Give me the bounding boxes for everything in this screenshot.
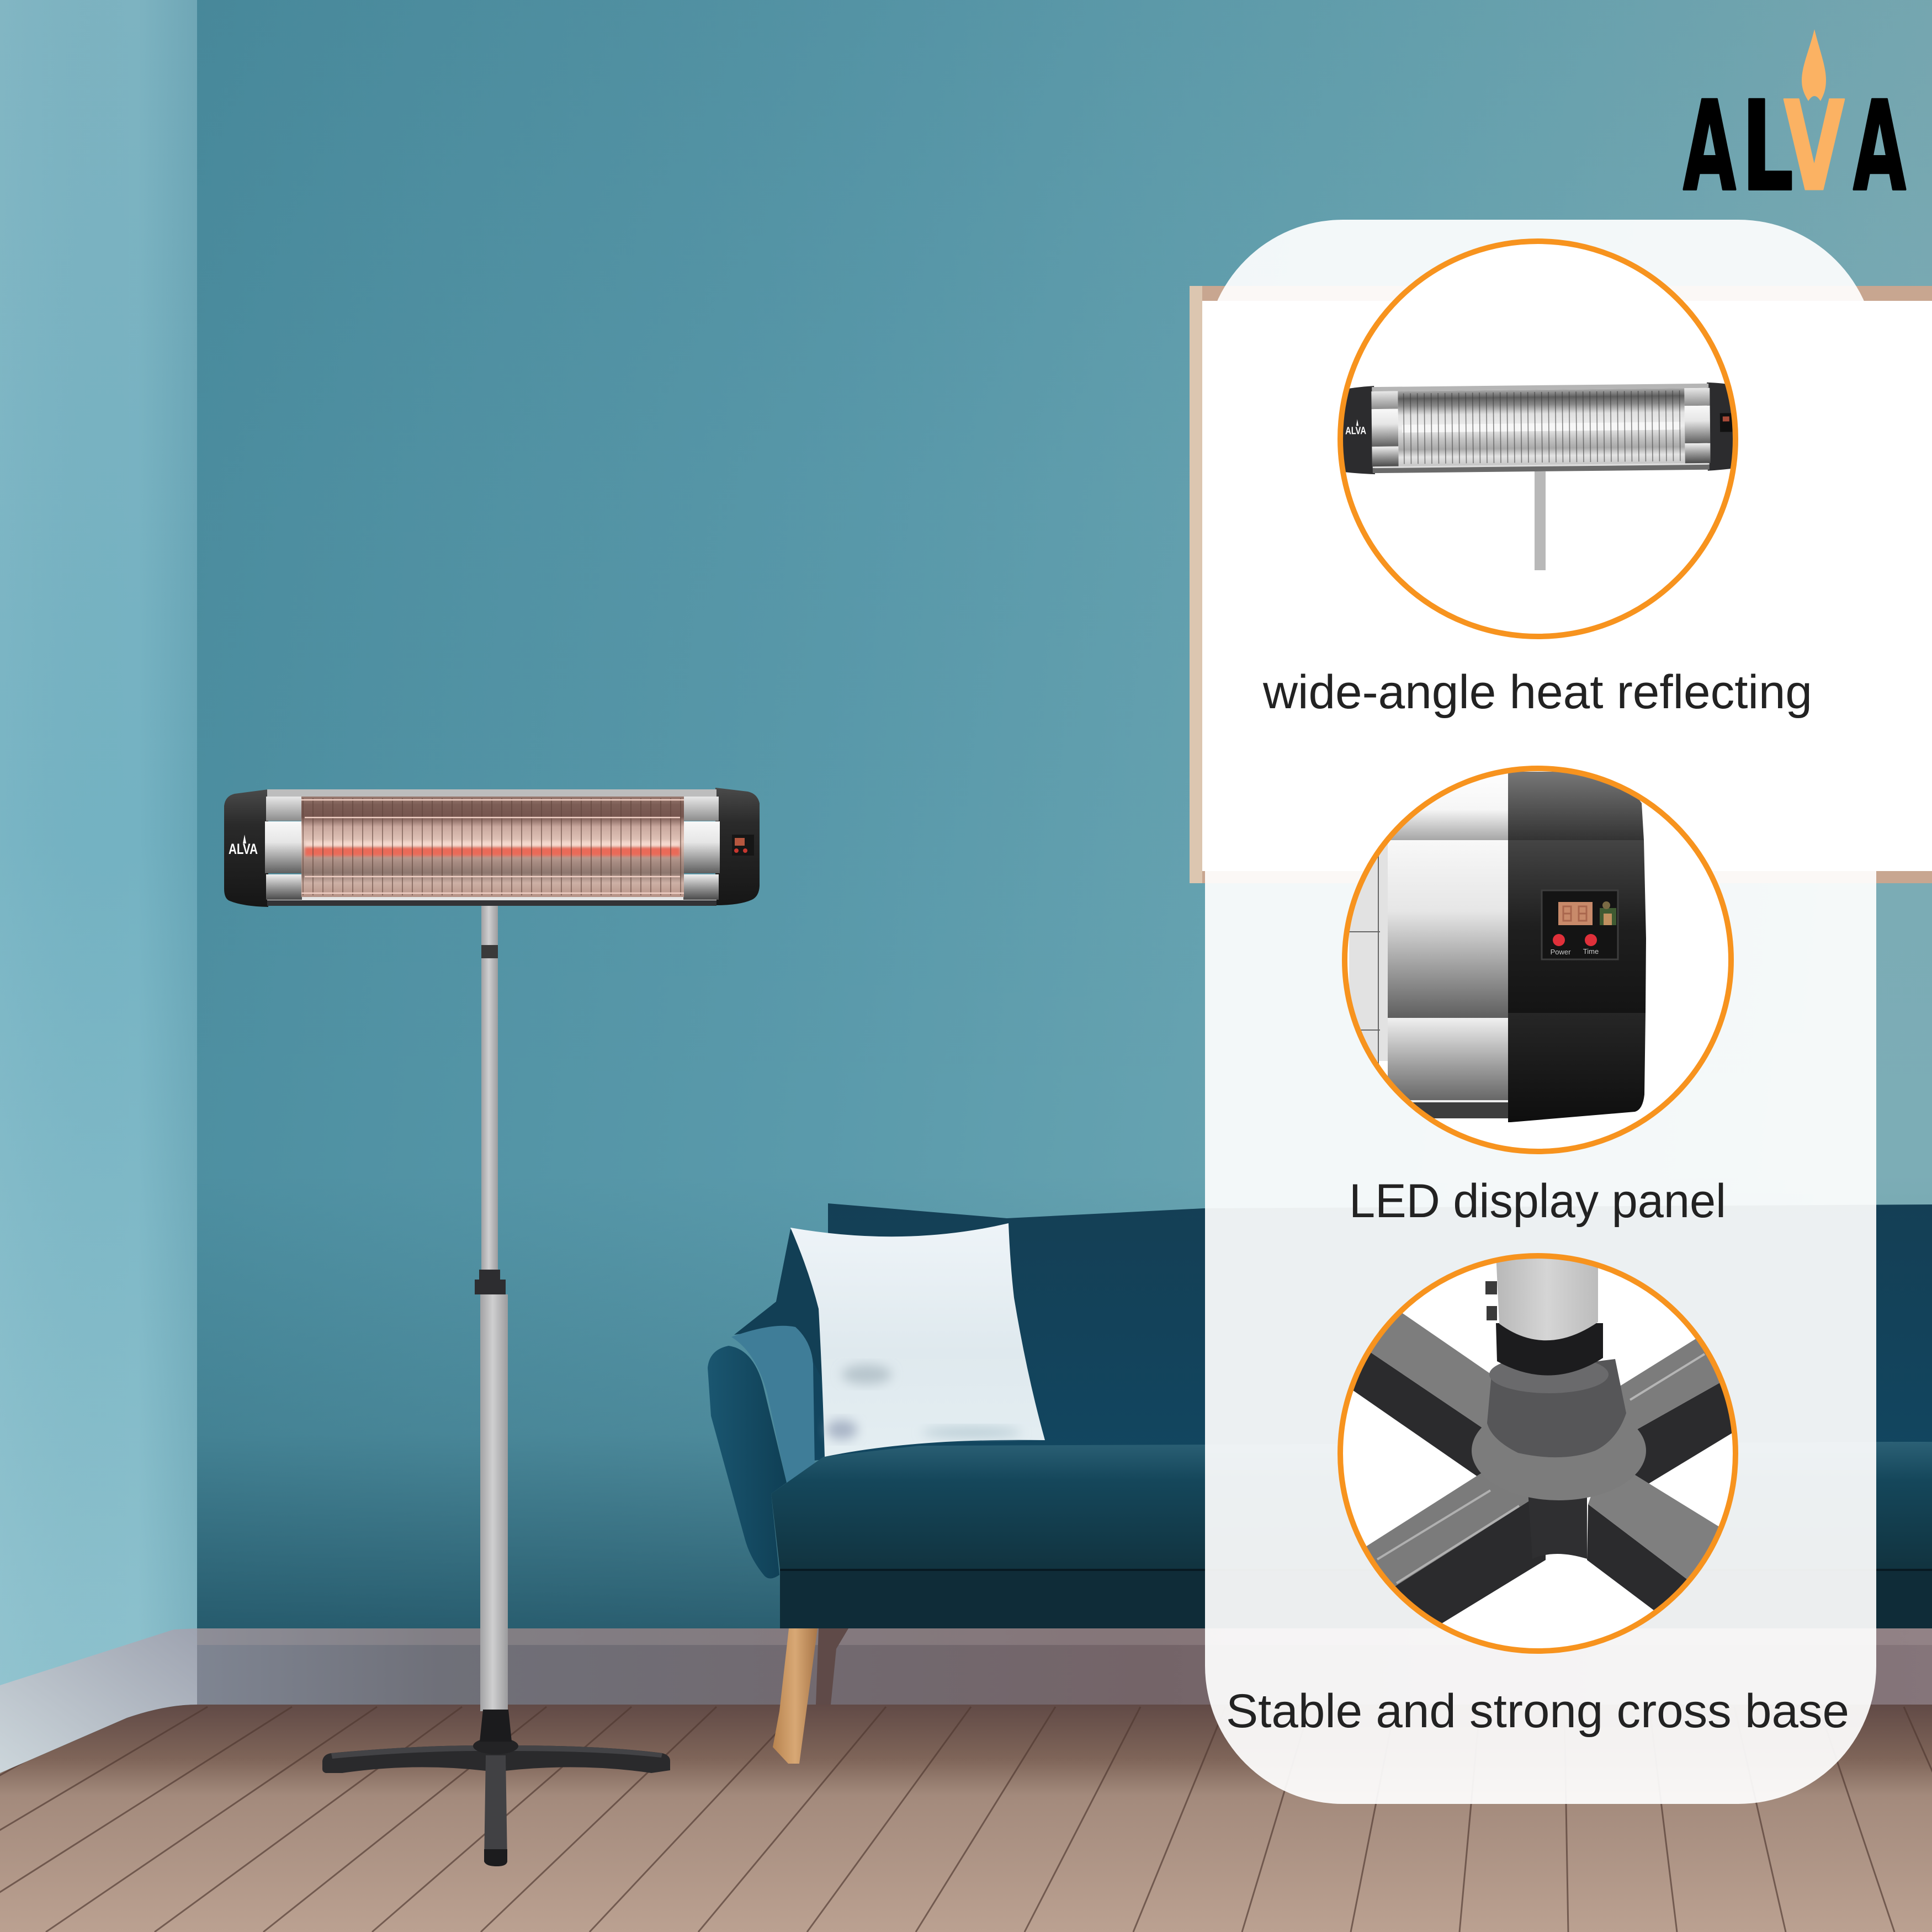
circle 1 heater image: ALVA xyxy=(1345,425,1366,437)
circle 3 base image xyxy=(1262,1252,1811,1689)
logo wordmark xyxy=(1683,75,1906,219)
LED control display xyxy=(1542,890,1618,959)
upper-right arm xyxy=(1590,1292,1811,1496)
logo wordmark: A xyxy=(1683,75,1736,219)
logo wordmark: L xyxy=(1742,75,1793,219)
heater logo xyxy=(229,835,258,857)
left wall xyxy=(0,0,197,1686)
heater body xyxy=(224,788,760,907)
sofa base xyxy=(780,1571,1932,1628)
circle 3 ring xyxy=(1340,1256,1735,1651)
picture frame on wall xyxy=(1190,286,1932,883)
base cross xyxy=(322,1710,670,1866)
caption: Stable and strong cross base: Stable and strong cross base xyxy=(1226,1685,1849,1738)
heater silver left side xyxy=(265,797,302,900)
upper pole tube xyxy=(481,905,498,1275)
circle 1 background xyxy=(1340,241,1735,636)
feature 3: cross base xyxy=(1262,1252,1811,1689)
circle 2 background xyxy=(1345,768,1731,1151)
main wall xyxy=(196,0,1932,1630)
feature 1: wide-angle heat reflecting xyxy=(1338,241,1742,636)
heater silver right side xyxy=(683,797,720,900)
sofa front leg xyxy=(773,1628,818,1764)
upper-left arm xyxy=(1265,1252,1524,1493)
heater logo: ALVA xyxy=(229,841,258,857)
circle 1 heater image xyxy=(1338,382,1742,570)
feature 2: LED display panel xyxy=(1345,768,1731,1151)
sofa arm shoulder xyxy=(734,1229,822,1380)
sofa rear leg xyxy=(816,1628,848,1705)
sofa xyxy=(708,1203,1932,1764)
heater left cap xyxy=(224,789,268,907)
wooden floor xyxy=(0,1705,1932,1932)
LED control display: Power xyxy=(1551,948,1571,956)
sofa outer arm xyxy=(708,1346,787,1579)
skirting board xyxy=(0,1628,1932,1773)
centre web xyxy=(1528,1490,1587,1559)
pole joint top xyxy=(481,945,498,958)
caption: wide-angle heat reflecting: wide-angle heat reflecting xyxy=(1262,666,1812,719)
logo wordmark: V xyxy=(1784,75,1845,219)
circle 2 ring xyxy=(1345,768,1731,1151)
tube xyxy=(1496,1253,1598,1340)
translucent feature panel xyxy=(1205,220,1876,1804)
standing heater xyxy=(224,788,760,1866)
lower pole tube xyxy=(480,1294,508,1711)
heating tube xyxy=(305,841,680,856)
throw pillow xyxy=(790,1223,1045,1457)
circle 1 ring xyxy=(1340,241,1735,636)
caption: LED display panel: LED display panel xyxy=(1349,1175,1726,1228)
LED control display: Time xyxy=(1583,947,1599,956)
hub xyxy=(1487,1359,1626,1457)
lower-right arm xyxy=(1587,1456,1799,1671)
lower-left arm xyxy=(1262,1446,1546,1689)
circle 2 control panel image xyxy=(1349,772,1646,1122)
sofa inner arm xyxy=(731,1326,815,1483)
heater screen xyxy=(301,797,684,897)
dark neck xyxy=(1496,1323,1603,1376)
heater right cap xyxy=(715,788,760,905)
logo flame xyxy=(1802,29,1826,101)
pole telescopic collar xyxy=(475,1270,506,1294)
flange xyxy=(1472,1401,1646,1500)
brand logo xyxy=(1683,29,1906,219)
heater control display xyxy=(732,835,754,856)
heater top and bottom rail xyxy=(267,789,716,906)
sofa seat xyxy=(771,1442,1932,1569)
sofa back xyxy=(776,1203,1932,1463)
clips xyxy=(1485,1281,1497,1320)
circle 3 background xyxy=(1340,1256,1735,1651)
